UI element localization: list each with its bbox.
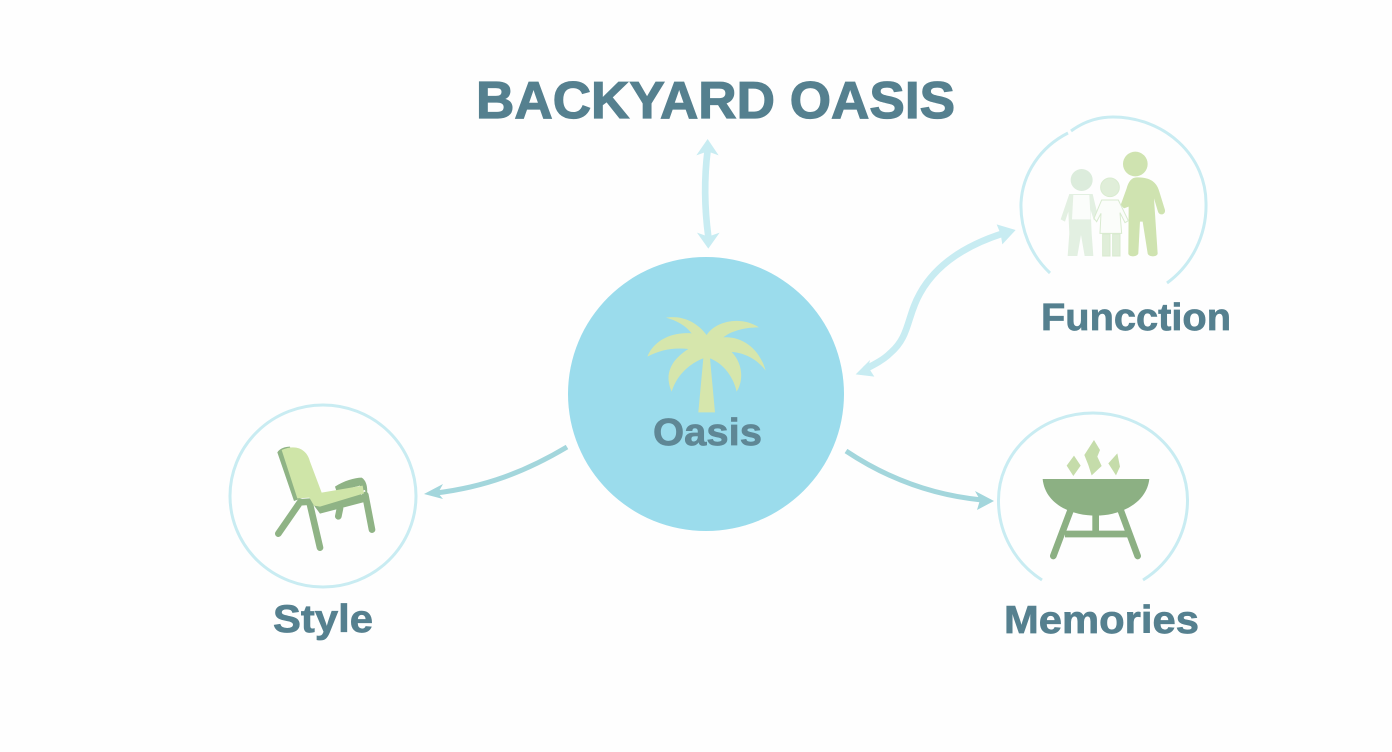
ring: [998, 413, 1188, 580]
icon: palm tree: [647, 317, 766, 412]
figure: left child: [1061, 169, 1097, 256]
label: Style: Style: [273, 598, 373, 641]
panel: function: [1021, 117, 1231, 339]
panel: oasis centre: [568, 257, 844, 531]
panel: style: [230, 405, 416, 641]
icon: chair: [277, 447, 372, 548]
label: Funcction: Funcction: [1041, 297, 1231, 339]
figure: middle child: [1094, 178, 1128, 256]
icon: grill: [1043, 440, 1149, 556]
chair seat underside, arm and back edge: [277, 447, 368, 514]
arrow: oasis to memories: [846, 451, 994, 510]
label: Oasis: Oasis: [653, 412, 762, 454]
arrow: title to oasis: [696, 139, 720, 249]
label: Memories: Memories: [1004, 599, 1199, 642]
arrow: oasis to function: [856, 224, 1016, 377]
ring: [230, 405, 416, 587]
figure: adult: [1121, 152, 1165, 256]
centre circle: [568, 257, 844, 531]
smoke: [1067, 440, 1120, 476]
title: BACKYARD OASIS: [476, 72, 955, 130]
chair cushion: [282, 447, 364, 507]
grill legs: [1053, 508, 1138, 556]
panel: memories: [998, 413, 1199, 642]
icon: family: [1061, 152, 1165, 256]
arrow: oasis to style: [424, 447, 567, 499]
grill bowl: [1043, 479, 1149, 516]
ring: [1021, 117, 1206, 283]
chair frame: [278, 495, 372, 548]
